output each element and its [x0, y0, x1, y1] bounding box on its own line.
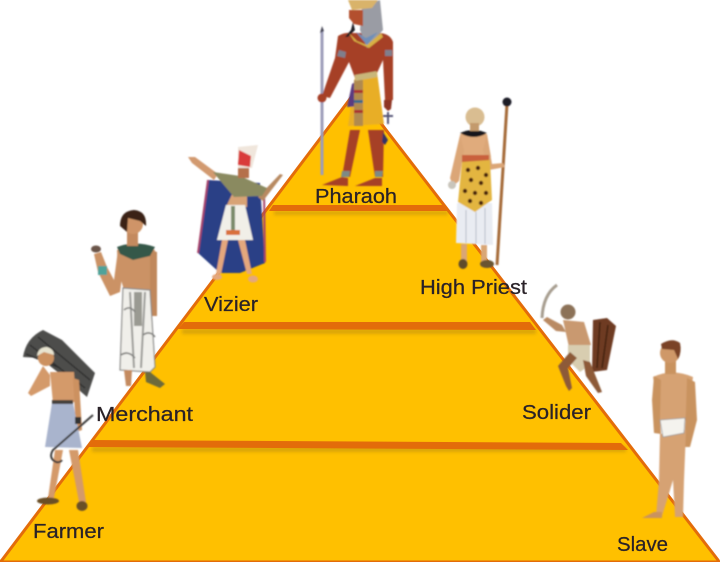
figure: slave: [642, 340, 697, 518]
figure: pharaoh: [318, 0, 393, 186]
label: Pharaoh: Pharaoh: [315, 185, 397, 208]
figure: merchant: [91, 210, 165, 388]
label: Farmer: Farmer: [33, 520, 104, 543]
figure: vizier: [188, 145, 283, 282]
label: Slave: Slave: [617, 533, 668, 556]
figure: soldier: [542, 285, 616, 393]
figure: farmer: [23, 330, 95, 511]
figure: high priest: [448, 98, 512, 269]
label: Solider: Solider: [522, 401, 591, 424]
label: High Priest: High Priest: [420, 276, 527, 299]
label: Merchant: Merchant: [96, 403, 193, 426]
label: Vizier: Vizier: [204, 293, 258, 316]
